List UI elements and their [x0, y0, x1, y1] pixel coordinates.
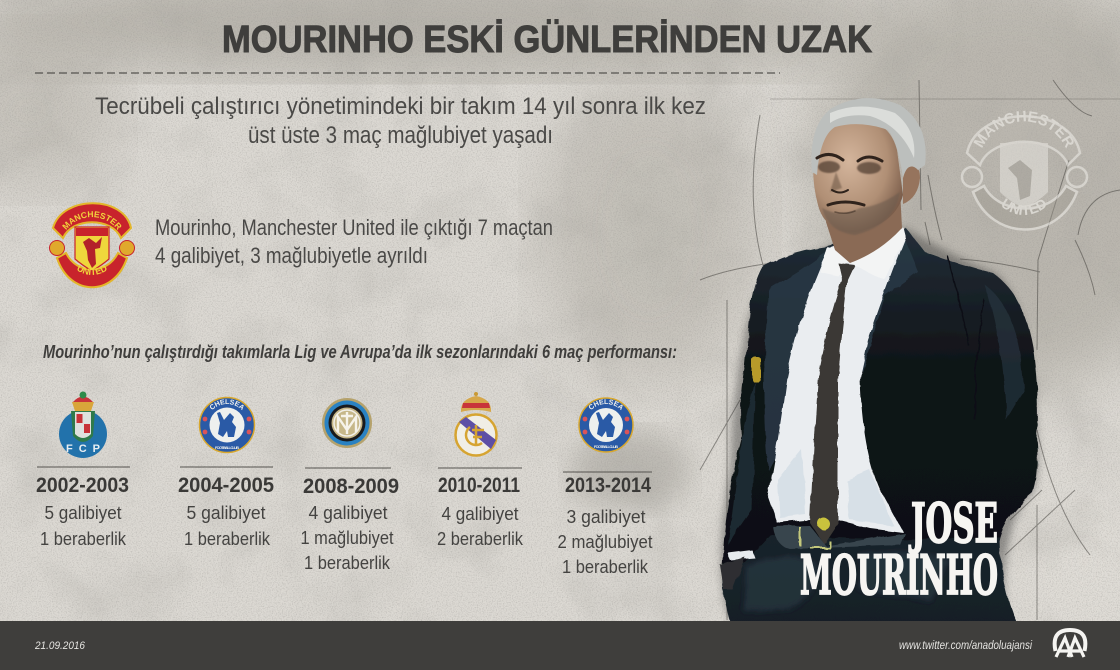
neck [826, 190, 902, 263]
icon: Chelsea crest [578, 397, 634, 453]
hair [811, 98, 926, 178]
column: Real Madrid 2010-2011: 2 beraberlik [437, 529, 524, 549]
shirt cuff and watch [728, 550, 755, 560]
Manchester United record text [155, 215, 553, 268]
icon: Chelsea crest: CHELSEA [588, 399, 623, 410]
photo illustration: Jose Mourinho [720, 98, 1038, 623]
eye sockets [818, 161, 881, 192]
column: Porto 2002-2003: 5 galibiyet [44, 503, 122, 523]
title: MOURINHO ESKİ GÜNLERİNDEN UZAK [222, 18, 872, 61]
icon: Manchester United crest [49, 202, 135, 288]
subtitle [95, 93, 706, 149]
Manchester United record text: Mourinho, Manchester United ile çıktığı 7 maçtan [155, 215, 553, 240]
trousers [722, 520, 1017, 623]
belt [773, 526, 905, 549]
column: Real Madrid 2010-2011 [437, 392, 524, 549]
watermark: Manchester United crest: MANCHESTER [974, 110, 1074, 148]
stubble shading [822, 192, 900, 235]
column: Chelsea 2013-2014: 2013-2014 [565, 474, 651, 497]
tie [810, 263, 855, 544]
jacket lapels and sleeve highlights [764, 240, 918, 470]
icon: Manchester United crest: UNITED [78, 264, 106, 275]
shirt [768, 232, 905, 532]
column: Inter 2008-2009: 4 galibiyet [308, 503, 388, 523]
jacket [722, 227, 1038, 570]
icon: Chelsea crest [198, 396, 256, 454]
date: 21.09.2016 [34, 640, 86, 652]
name label: Jose Mourinho: JOSE [909, 491, 998, 555]
footer bar [0, 621, 1120, 670]
face [813, 118, 903, 232]
watermark: Manchester United crest: UNITED [1002, 198, 1046, 215]
column: Chelsea 2004-2005: 5 galibiyet [186, 503, 266, 523]
column: Porto 2002-2003: 2002-2003 [36, 474, 129, 497]
icon: Chelsea crest: CHELSEA [210, 399, 244, 410]
section heading: Mourinho’nun çalıştırdığı takımlarla Lig ve Avrupa’da ilk sezonlarındaki 6 maç performansı: [43, 342, 677, 362]
column: Chelsea 2013-2014: 3 galibiyet [566, 507, 646, 527]
tie pin [817, 517, 829, 529]
column: Real Madrid 2010-2011: 2010-2011 [438, 474, 520, 497]
name label: Jose Mourinho [800, 491, 998, 607]
watermark: Manchester United crest [960, 110, 1088, 231]
jacket badge [752, 357, 761, 382]
column: Inter 2008-2009 [300, 398, 399, 573]
column: Chelsea 2013-2014 [558, 397, 652, 577]
collar [820, 226, 905, 280]
brows nose mouth [817, 154, 882, 213]
icon: Inter crest [322, 398, 372, 448]
ear [903, 166, 920, 204]
column: Chelsea 2013-2014: 2 mağlubiyet [558, 532, 652, 552]
column: Real Madrid 2010-2011: 4 galibiyet [442, 504, 518, 524]
icon: Anadolu Agency logo [1055, 630, 1085, 657]
column: Porto 2002-2003 [36, 392, 130, 549]
column: Chelsea 2004-2005: 2004-2005 [178, 474, 274, 497]
column: Porto 2002-2003: 1 beraberlik [40, 529, 127, 549]
column: Chelsea 2004-2005 [178, 396, 274, 549]
column: Inter 2008-2009: 2008-2009 [303, 475, 399, 498]
column: Inter 2008-2009: 1 beraberlik [304, 553, 391, 573]
icon: FC Porto crest [59, 392, 107, 458]
icon: Chelsea crest: FOOTBALL CLUB [594, 444, 618, 449]
column: Chelsea 2013-2014: 1 beraberlik [562, 557, 649, 577]
subtitle: Tecrübeli çalıştırıcı yönetimindeki bir takım 14 yıl sonra ilk kez [95, 93, 706, 120]
source url: www.twitter.com/anadoluajansi [899, 640, 1032, 652]
icon: Real Madrid crest [456, 392, 496, 456]
icon: Chelsea crest: FOOTBALL CLUB [215, 445, 239, 450]
subtitle: üst üste 3 maç mağlubiyet yaşadı [248, 122, 553, 149]
Manchester United record text: 4 galibiyet, 3 mağlubiyetle ayrıldı [155, 243, 428, 268]
jacket seams [947, 255, 985, 420]
icon: FC Porto crest: F C P [66, 443, 100, 455]
column: Chelsea 2004-2005: 1 beraberlik [184, 529, 271, 549]
column: Inter 2008-2009: 1 mağlubiyet [300, 528, 394, 548]
sketch lines behind the figure [700, 80, 1120, 620]
figure shadow [721, 228, 1038, 620]
title divider [35, 72, 780, 74]
icon: Manchester United crest: MANCHESTER [62, 211, 122, 230]
